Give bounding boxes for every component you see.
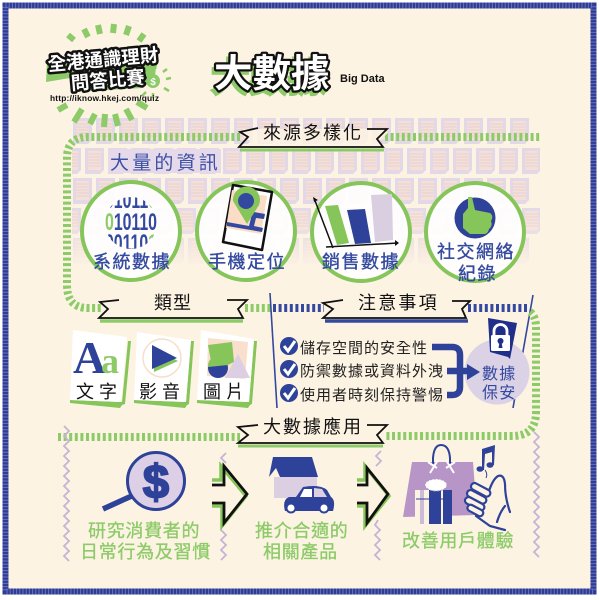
icon: green sunburst [58, 24, 159, 127]
green dashed flow bottom left [58, 433, 240, 441]
card: 圖片 [197, 330, 257, 408]
icon: lock [488, 318, 517, 359]
label: 銷售數據 [322, 252, 400, 272]
card: 文字: A [73, 332, 106, 383]
green dashed flow right and bottom [384, 312, 536, 436]
logo heading: 全港通識理財 [47, 44, 159, 75]
icon: magnifier with dollar: $ [143, 455, 169, 508]
card: 影音 [134, 332, 194, 408]
application: research [80, 452, 211, 562]
label: 社交網絡 [437, 242, 515, 262]
item 3: 使用者時刻保持警惕 [300, 387, 444, 404]
label: 系統數據 [93, 252, 171, 272]
panel: 社交網絡紀錄: 紀錄 [458, 264, 497, 284]
title [211, 53, 386, 100]
blue dashed link right [468, 304, 527, 312]
banner: 大數據應用: 大數據應用 [263, 416, 363, 437]
banner: 來源多樣化 [239, 123, 388, 151]
icon: hand thumbs up [464, 476, 510, 530]
data security badge: 保安 [482, 384, 516, 402]
icon: house and car [269, 457, 334, 512]
item 2: 防禦數據或資料外洩 [300, 363, 444, 380]
application: research: 日常行為及習慣 [80, 542, 211, 562]
zigzag dividers [64, 426, 539, 561]
card: 文字 [70, 330, 131, 408]
vertical divider right [513, 295, 533, 408]
label: 研究消費者的 [88, 521, 200, 541]
bar chart icon [313, 194, 399, 248]
icon: binary data [106, 197, 156, 249]
heading: 大量的資訊: 大量的資訊 [110, 152, 221, 174]
title: 大數據 [214, 53, 330, 96]
panel: 系統數據 [82, 182, 180, 280]
logo: quiz competition [46, 24, 171, 127]
icon: binary data: 010110 [105, 187, 157, 214]
banner: 類型: 類型 [154, 293, 192, 313]
green dashed flow top and left [67, 137, 240, 308]
title: 大數據 [211, 57, 327, 100]
logo heading: 問答比賽 [70, 66, 146, 94]
data security badge [464, 318, 530, 404]
paper keyboard background [65, 118, 545, 267]
green dashed link [245, 304, 271, 312]
green dashed flow top right [385, 133, 541, 141]
arrow 1 [212, 466, 247, 526]
card: 圖片: 圖片 [203, 382, 249, 402]
label: 改善用戶體驗 [402, 531, 514, 551]
banner: 來源多樣化: 來源多樣化 [263, 123, 363, 143]
label: 手機定位 [208, 252, 286, 272]
icon: music notes [476, 445, 495, 478]
banner: 類型 [99, 293, 247, 321]
vertical divider left [270, 293, 277, 408]
icon: phone with map pin [223, 185, 272, 250]
application: recommend [255, 457, 348, 562]
icon: binary data: 010110 [105, 209, 157, 236]
banner: 注意事項 [323, 293, 470, 321]
item 1: 儲存空間的安全性 [300, 340, 428, 357]
title: Big Data [340, 73, 386, 85]
banner: 大數據應用 [238, 416, 387, 446]
icon: binary data: 001101 [105, 230, 157, 257]
icon: thumbs up [454, 197, 496, 238]
label: 推介合適的 [255, 521, 348, 541]
arrow: checklist to data security [432, 347, 480, 395]
blue dashed link left [273, 304, 324, 312]
banner: 注意事項: 注意事項 [358, 293, 439, 313]
panel: 銷售數據 [312, 183, 410, 281]
application: recommend: 相關產品 [263, 542, 338, 562]
card: 文字: 文字 [76, 382, 122, 402]
icon: dollar coin: $ [150, 77, 156, 88]
icon: gift box [415, 479, 452, 524]
panel: 社交網絡紀錄 [426, 183, 524, 284]
card: 文字: a [101, 341, 119, 381]
checklist [280, 337, 444, 404]
icon: shopping bag [403, 445, 477, 517]
logo heading [47, 44, 161, 96]
logo url: http://iknow.hkej.com/quiz [50, 93, 159, 103]
arrow 2 [357, 466, 389, 526]
application: experience [402, 445, 514, 551]
card: 影音: 影音 [139, 382, 185, 402]
panel: 手機定位 [197, 182, 295, 280]
data security badge: 數據 [482, 365, 516, 383]
